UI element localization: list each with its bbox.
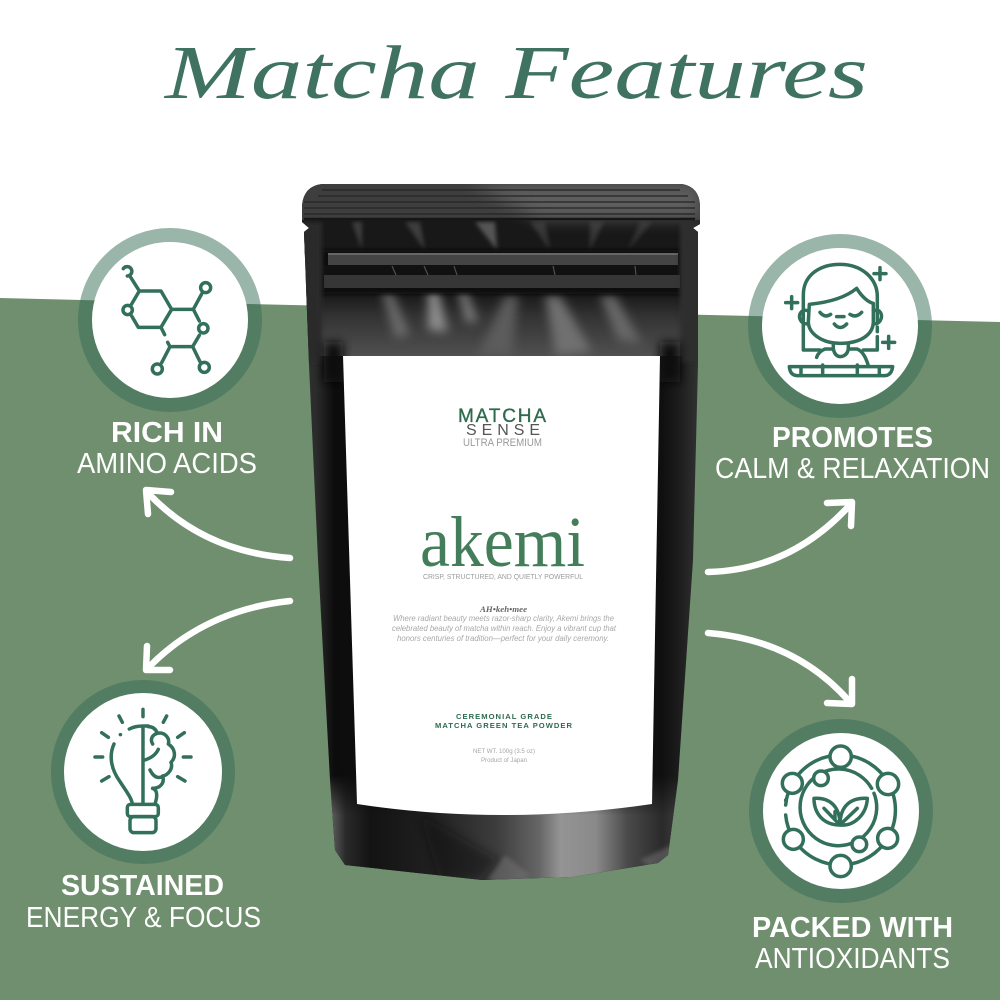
grade text: CEREMONIAL GRADE: [456, 712, 552, 721]
icon circle: energy and focus: [58, 687, 228, 857]
net weight: Product of Japan: [481, 757, 527, 764]
label: promotes calm: [715, 422, 990, 485]
pouch side bands: [298, 222, 704, 382]
label: sustained energy: SUSTAINED: [61, 870, 224, 902]
label: rich in amino acids: RICH IN: [111, 417, 223, 449]
brand logo: SENSE: [466, 422, 540, 439]
net weight: [473, 748, 535, 764]
pronunciation: AH•keh•mee: [479, 604, 527, 614]
pouch zip strip: [320, 250, 682, 294]
icon: light bulb with brain: [95, 709, 191, 833]
pouch label: [343, 356, 660, 815]
brand logo: MATCHA: [458, 406, 546, 427]
arrow: to antioxidants: [708, 633, 852, 704]
label: rich in amino acids: AMINO ACIDS: [77, 448, 257, 480]
icon: molecule: [123, 267, 211, 374]
label: sustained energy: [26, 870, 261, 934]
product name: akemi: [420, 502, 585, 582]
product pouch: [298, 180, 704, 885]
icon circle: calm: [755, 241, 925, 411]
icon: meditating person: [786, 264, 895, 376]
net weight: NET WT. 100g (3.5 oz): [473, 748, 535, 755]
background: green slanted panel: [0, 298, 1000, 1000]
arrow: to calm: [708, 502, 852, 572]
brand logo: ULTRA PREMIUM: [463, 437, 542, 449]
pouch wrinkles above zip: [300, 220, 702, 254]
description: [392, 613, 617, 643]
icon: leaf with orbiting nodes: [782, 746, 899, 877]
arrow: to amino acids: [146, 490, 290, 558]
label: sustained energy: ENERGY & FOCUS: [26, 902, 261, 934]
tagline: CRISP, STRUCTURED, AND QUIETLY POWERFUL: [423, 572, 583, 581]
arrow: to energy and focus: [146, 601, 290, 670]
label: rich in amino acids: [77, 417, 257, 480]
label: packed with antioxidants: ANTIOXIDANTS: [755, 943, 950, 975]
pouch panel below zip: [300, 290, 702, 356]
description: celebrated beauty of matcha within reach. Enjoy a vibrant cup that: [392, 623, 617, 633]
description: honors centuries of tradition—perfect for your daily ceremony.: [397, 633, 609, 643]
label: packed with antioxidants: [752, 912, 953, 975]
title: Matcha Features: [164, 31, 868, 115]
icon circle: antioxidants: [756, 726, 926, 896]
pouch bottom sheen: [330, 780, 677, 880]
grade text: MATCHA GREEN TEA POWDER: [435, 721, 573, 730]
label: promotes calm: PROMOTES: [772, 422, 933, 454]
description: Where radiant beauty meets razor-sharp clarity, Akemi brings the: [393, 613, 614, 623]
pouch top seal: [300, 184, 702, 220]
brand logo: [458, 406, 546, 449]
grade text: [435, 712, 573, 730]
icon circle: amino acids: [85, 235, 255, 405]
label: packed with antioxidants: PACKED WITH: [752, 912, 953, 944]
